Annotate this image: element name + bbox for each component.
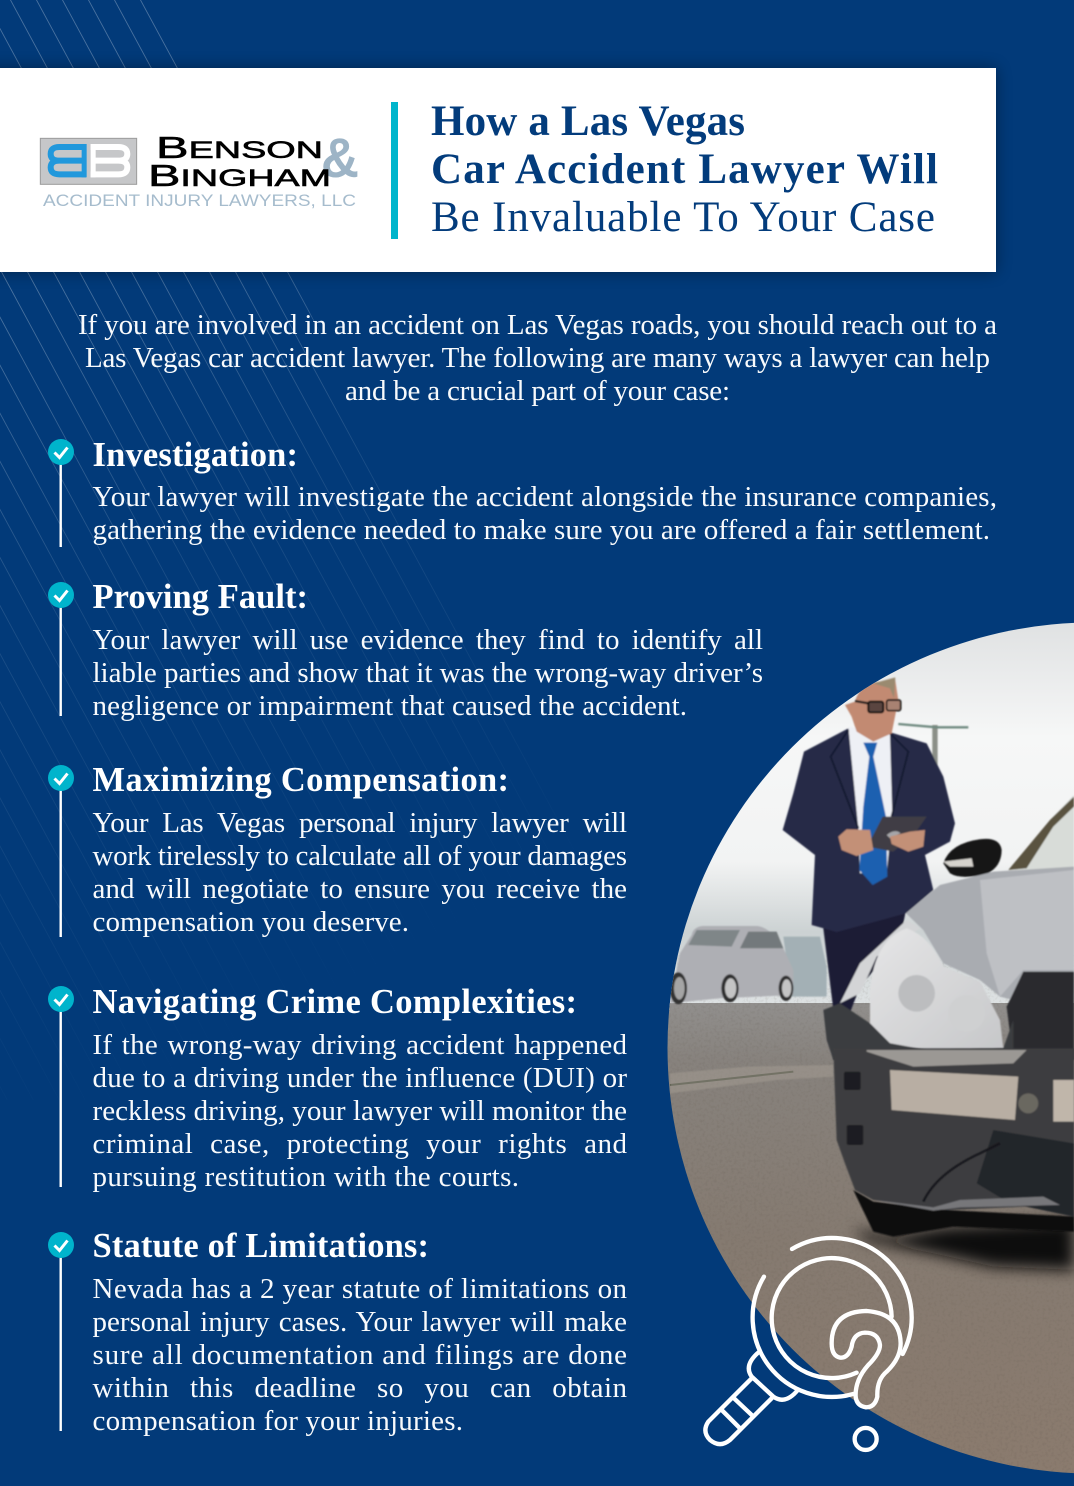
heading: Navigating Crime Complexities: bbox=[92, 983, 577, 1021]
section: statute of limitations bbox=[48, 1227, 628, 1437]
logo ampersand: & bbox=[321, 126, 359, 189]
logo bbox=[40, 126, 359, 210]
intro text: If you are involved in an accident on Las Vegas roads, you should reach out to a bbox=[78, 309, 997, 341]
body: compensation you deserve. bbox=[92, 906, 409, 938]
body: Your lawyer will investigate the accident alongside the insurance companies, bbox=[92, 481, 997, 513]
section: proving fault bbox=[48, 578, 763, 722]
body: liable parties and show that it was the wrong-way driver’s bbox=[92, 657, 763, 689]
divider bar bbox=[391, 102, 398, 239]
body bbox=[92, 481, 997, 546]
mirror bbox=[943, 839, 1002, 877]
crash bar bbox=[890, 1070, 1018, 1120]
fender and headlight bbox=[839, 920, 905, 1004]
tablet bbox=[867, 817, 927, 852]
body bbox=[92, 807, 627, 938]
distant pole bbox=[931, 724, 939, 766]
body: If the wrong-way driving accident happened bbox=[92, 1029, 628, 1061]
background stripes top bbox=[0, 0, 180, 68]
intro text bbox=[78, 309, 997, 407]
marker bbox=[48, 765, 74, 937]
engine bay bbox=[1007, 972, 1074, 1060]
body: due to a driving under the influence (DUI) or bbox=[92, 1062, 627, 1094]
heading: Proving Fault: bbox=[92, 578, 308, 616]
photo: lawyer and damaged car bbox=[660, 620, 1074, 1483]
logo mark bbox=[40, 138, 137, 184]
heading: Investigation: bbox=[92, 436, 298, 474]
trousers bbox=[822, 912, 906, 1011]
lens outer arc bbox=[753, 1238, 912, 1397]
heading: Maximizing Compensation: bbox=[92, 761, 509, 799]
face bbox=[845, 678, 898, 742]
hands bbox=[838, 829, 873, 856]
body: personal injury cases. Your lawyer will make bbox=[92, 1306, 627, 1338]
lens inner arc bbox=[772, 1258, 892, 1378]
handle bbox=[705, 1378, 772, 1444]
body: pursuing restitution with the courts. bbox=[92, 1161, 519, 1193]
parked cars bbox=[783, 937, 827, 997]
logo name line 1: B ENSON bbox=[156, 130, 323, 165]
road marking bbox=[670, 1072, 793, 1085]
marker bbox=[48, 1232, 74, 1431]
bumper bbox=[833, 1048, 1074, 1237]
heading: Statute of Limitations: bbox=[92, 1227, 429, 1265]
title: Car Accident Lawyer Will bbox=[431, 146, 938, 193]
section: navigating crime complexities bbox=[48, 983, 628, 1193]
icon: magnifying glass with question mark bbox=[705, 1238, 912, 1450]
handle collar bbox=[749, 1352, 797, 1400]
windscreen bbox=[1008, 795, 1074, 870]
question mark bbox=[832, 1311, 901, 1407]
tie bbox=[859, 743, 887, 885]
body: Nevada has a 2 year statute of limitations on bbox=[92, 1273, 628, 1305]
jacket bbox=[783, 728, 955, 932]
logo tagline: ACCIDENT INJURY LAWYERS, LLC bbox=[43, 191, 356, 210]
body: and will negotiate to ensure you receive the bbox=[92, 873, 627, 905]
marker bbox=[48, 439, 74, 547]
header card bbox=[0, 68, 996, 272]
logo name line 2: B INGHAM bbox=[148, 158, 331, 193]
shirt bbox=[848, 727, 892, 873]
body: sure all documentation and filings are done bbox=[92, 1339, 627, 1371]
body: Your Las Vegas personal injury lawyer will bbox=[92, 807, 627, 839]
body: work tirelessly to calculate all of your damages bbox=[92, 840, 627, 872]
body: gathering the evidence needed to make sure you are offered a fair settlement. bbox=[92, 514, 990, 546]
section: investigation bbox=[48, 436, 997, 547]
body: negligence or impairment that caused the accident. bbox=[92, 690, 687, 722]
shadow under car bbox=[853, 1220, 1074, 1270]
handle bands bbox=[723, 1398, 752, 1428]
hood bbox=[906, 867, 1074, 1003]
body: Your lawyer will use evidence they find to identify all bbox=[92, 624, 763, 656]
body: criminal case, protecting your rights and bbox=[92, 1128, 628, 1160]
marker bbox=[48, 986, 74, 1187]
tyre bbox=[853, 1190, 1074, 1237]
intro text: and be a crucial part of your case: bbox=[345, 375, 730, 407]
body: within this deadline so you can obtain bbox=[92, 1372, 628, 1404]
body bbox=[92, 624, 763, 722]
section: maximizing compensation bbox=[48, 761, 627, 938]
intro text: Las Vegas car accident lawyer. The following are many ways a lawyer can help bbox=[85, 342, 990, 374]
body: reckless driving, your lawyer will monitor the bbox=[92, 1095, 627, 1127]
body bbox=[92, 1029, 628, 1193]
title: Be Invaluable To Your Case bbox=[431, 194, 935, 241]
background stripes middle bbox=[0, 272, 508, 994]
lapels bbox=[831, 730, 908, 828]
title: How a Las Vegas bbox=[431, 98, 745, 145]
question dot bbox=[855, 1428, 877, 1450]
body bbox=[92, 1273, 628, 1437]
title bbox=[431, 98, 938, 241]
marker bbox=[48, 582, 74, 716]
body: compensation for your injuries. bbox=[92, 1405, 463, 1437]
bumper top bbox=[823, 1003, 1013, 1060]
